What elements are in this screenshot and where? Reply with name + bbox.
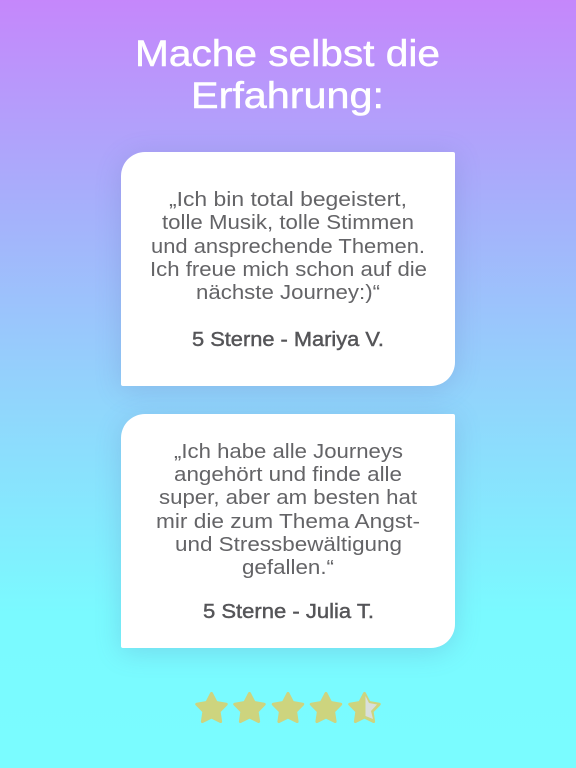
- review 2 text: angehört und finde alle: [174, 464, 402, 486]
- review 1 text: nächste Journey:)“: [196, 282, 380, 304]
- review 2 text: [156, 441, 420, 579]
- review 1 text: und ansprechende Themen.: [151, 236, 425, 258]
- panel: review card 1: [121, 152, 455, 386]
- review 1 author: 5 Sterne - Mariya V.: [192, 329, 384, 351]
- review 2 author: 5 Sterne - Julia T.: [203, 601, 374, 623]
- review 1 text: tolle Musik, tolle Stimmen: [162, 212, 414, 234]
- review 2 text: „Ich habe alle Journeys: [174, 441, 403, 463]
- review 1 text: [150, 189, 427, 304]
- title: Erfahrung:: [191, 75, 384, 116]
- icon: star rating: [197, 694, 379, 722]
- review 1 text: „Ich bin total begeistert,: [169, 189, 407, 211]
- panel: review card 2: [121, 414, 455, 648]
- title: [135, 33, 440, 116]
- title: Mache selbst die: [135, 33, 440, 74]
- review 2 text: mir die zum Thema Angst-: [156, 511, 420, 533]
- review 1 text: Ich freue mich schon auf die: [150, 259, 427, 281]
- review 2 text: und Stressbewältigung: [175, 534, 402, 556]
- review 2 text: gefallen.“: [242, 557, 334, 579]
- review 2 text: super, aber am besten hat: [159, 487, 417, 509]
